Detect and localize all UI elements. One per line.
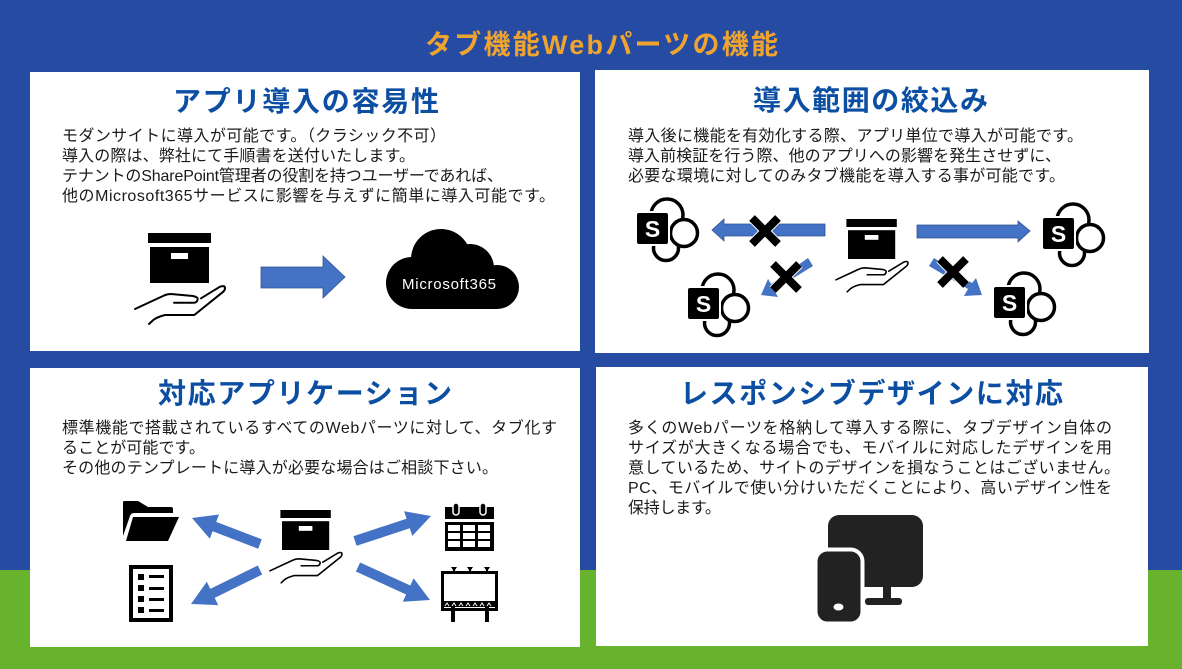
body text: ることが可能です。 xyxy=(62,439,205,457)
icon: box on hand xyxy=(836,219,908,292)
body text: 必要な環境に対してのみタブ機能を導入する事が可能です。 xyxy=(628,166,1065,185)
arrow: blocked lower left xyxy=(761,258,813,297)
icon: checklist xyxy=(131,567,171,620)
heading: レスポンシブデザインに対応 xyxy=(680,377,1063,409)
icon: folder xyxy=(123,501,179,541)
background: green band xyxy=(0,570,1182,669)
arrow: to calendar xyxy=(353,511,431,546)
body text: 導入前検証を行う際、他のアプリへの影響を発生させずに、 xyxy=(628,146,1061,165)
arrow: to Microsoft365 xyxy=(261,256,345,298)
body text: その他のテンプレートに導入が必要な場合はご相談下さい。 xyxy=(62,458,498,477)
heading: アプリ導入の容易性 xyxy=(173,86,439,117)
panel: レスポンシブデザインに対応 xyxy=(596,367,1148,646)
body text: 他のMicrosoft365サービスに影響を与えずに簡単に導入可能です。 xyxy=(62,186,555,205)
arrow: to folder xyxy=(192,514,262,549)
body text: モダンサイトに導入が可能です。（クラシック不可） xyxy=(62,126,446,145)
body text: 多くのWebパーツを格納して導入する際に、タブデザイン自体の xyxy=(628,418,1112,437)
body text: PC、モバイルで使い分けいただくことにより、高いデザイン性を xyxy=(628,478,1112,497)
panel background xyxy=(595,70,1149,353)
body text xyxy=(628,126,1083,185)
panel: 対応アプリケーション xyxy=(30,368,580,647)
title: タブ機能Webパーツの機能 xyxy=(425,29,778,60)
icon: cross lower left xyxy=(773,264,799,290)
icon: box on hand xyxy=(135,233,225,324)
body text xyxy=(628,418,1120,517)
panel background xyxy=(30,72,580,351)
icon: SharePoint lower left xyxy=(687,274,748,336)
icon: Microsoft365 cloud xyxy=(386,229,519,309)
body text xyxy=(62,126,555,205)
arrow: allowed right xyxy=(917,221,1030,242)
arrow: to billboard xyxy=(356,562,430,602)
icon: SharePoint lower right xyxy=(993,273,1054,334)
icon: Microsoft365 cloud: Microsoft365 xyxy=(402,276,496,293)
arrow: to list xyxy=(191,566,262,605)
body text: 標準機能で搭載されているすべてのWebパーツに対して、タブ化す xyxy=(62,418,557,437)
icon: box on hand xyxy=(270,510,342,583)
icon: cross left xyxy=(752,218,778,244)
panel: 導入範囲の絞込み xyxy=(595,70,1149,353)
heading: 導入範囲の絞込み xyxy=(753,85,988,116)
body text: 導入後に機能を有効化する際、アプリ単位で導入が可能です。 xyxy=(628,126,1083,145)
icon: SharePoint top left xyxy=(636,199,698,260)
icon: cross lower right xyxy=(940,259,966,285)
body text xyxy=(62,418,557,477)
body text: 導入の際は、弊社にて手順書を送付いたします。 xyxy=(62,146,415,165)
body text: 保持します。 xyxy=(628,499,721,517)
body text: 意しているため、サイトのデザインを損なうことはございません。 xyxy=(628,458,1120,477)
panel: アプリ導入の容易性 xyxy=(30,72,580,351)
icon: calendar xyxy=(445,503,494,551)
panel background xyxy=(30,368,580,647)
arrow: blocked left xyxy=(712,219,825,241)
icon: billboard xyxy=(441,567,498,622)
icon: desktop and phone xyxy=(816,515,923,624)
body text: サイズが大きくなる場合でも、モバイルに対応したデザインを用 xyxy=(628,438,1112,457)
body text: テナントのSharePoint管理者の役割を持つユーザーであれば、 xyxy=(62,167,503,185)
heading: 対応アプリケーション xyxy=(158,378,452,409)
panel background xyxy=(596,367,1148,646)
arrow: blocked lower right xyxy=(929,258,982,296)
icon: SharePoint top right xyxy=(1042,204,1104,266)
